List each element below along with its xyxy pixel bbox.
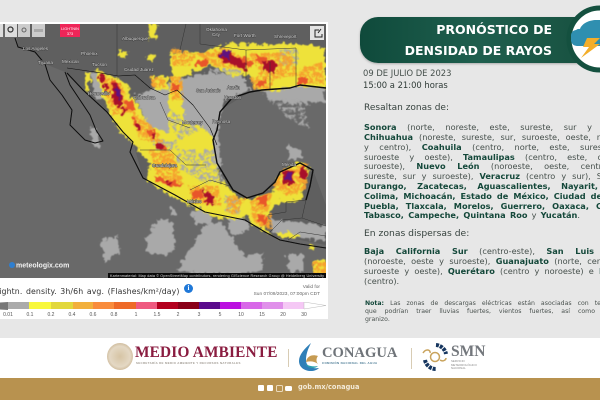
- header banner: [360, 17, 600, 63]
- text block: main lightning zones: suroeste), Nuevo León (noroeste, oeste, centr: [364, 161, 600, 171]
- city labels: Reynosa: [212, 119, 231, 124]
- city labels: Houston: [224, 95, 242, 100]
- text block: main lightning zones: sureste, sur y suroeste), Veracruz (centro y sur), S: [364, 171, 600, 181]
- city labels: Oklahoma: [206, 27, 227, 32]
- legend tick labels: 15: [259, 312, 265, 318]
- legend tick labels: 30: [301, 312, 307, 318]
- intro: En zonas dispersas de: En zonas dispersas de:: [364, 228, 469, 239]
- legend color scale: [0, 302, 326, 310]
- text block: main lightning zones: suroeste y oeste), Tamaulipas (centro, este, c: [364, 152, 600, 162]
- text block: main lightning zones: Colima, Michoacán, Estado de México, Ciudad de: [364, 191, 600, 201]
- city labels: Austin: [227, 85, 240, 90]
- text block: main lightning zones: Chihuahua (noreste, sureste, sur, suroeste, oeste, n: [364, 132, 600, 142]
- city labels: Monterrey: [182, 120, 203, 125]
- tagline: SERVICIO: [451, 359, 465, 363]
- map: [0, 24, 326, 278]
- valid time: Sun 07/09/2023, 07:00pm CDT: [254, 292, 320, 296]
- city labels: [23, 27, 297, 204]
- title: [405, 22, 552, 58]
- wordmark: MEDIO AMBIENTE: [135, 344, 278, 361]
- red lightning counter badge: LIGHTNIN: [61, 27, 79, 31]
- icon: storm cloud badge: [571, 6, 600, 72]
- legend tick labels: [3, 312, 307, 318]
- panel: lightning density map card: [0, 22, 328, 319]
- legend tick labels: 3: [198, 312, 200, 318]
- city labels: Phoenix: [81, 51, 98, 56]
- red lightning counter badge: 373: [67, 32, 73, 36]
- intro: Resaltan zonas de: Resaltan zonas de:: [364, 103, 449, 113]
- valid time: Valid for: [303, 285, 320, 290]
- city labels: Ciudad Juárez: [124, 67, 154, 72]
- legend tick labels: 0.8: [111, 312, 117, 318]
- icon: water wave: [299, 343, 319, 371]
- icon: info: [184, 284, 193, 293]
- title: PRONÓSTICO DE: [436, 22, 552, 36]
- text block: scattered zones: (noroeste, oeste y suroeste), Guanajuato (norte, cen: [364, 256, 600, 266]
- city labels: Hermosillo: [88, 91, 110, 96]
- logo: SMN: [422, 343, 486, 371]
- legend tick labels: 0.6: [90, 312, 96, 318]
- city labels: Albuquerque: [122, 36, 148, 41]
- legend tick labels: 0.1: [27, 312, 33, 318]
- social icons: [258, 385, 292, 392]
- icon: national seal: [107, 343, 133, 370]
- text block: main lightning zones: Sonora (norte, noreste, este, sureste, sur y: [364, 122, 592, 132]
- note: granizo.: [365, 316, 390, 323]
- text block: main lightning zones: Durango, Zacatecas, Aguascalientes, Nayarit,: [364, 181, 598, 191]
- logo: Conagua: [299, 343, 398, 371]
- text block: scattered zones: [364, 246, 600, 286]
- legend tick labels: 0.4: [69, 312, 75, 318]
- city labels: Chihuahua: [133, 95, 156, 100]
- wordmark: CONAGUA: [322, 345, 397, 361]
- text block: scattered zones: suroeste y oeste), Querétaro (centro y noroeste) e I: [364, 266, 600, 276]
- legend tick labels: 0.01: [3, 312, 13, 318]
- city labels: San Antonio: [196, 88, 221, 93]
- city labels: Los Angeles: [23, 46, 49, 51]
- tagline: COMISIÓN NACIONAL DEL AGUA: [322, 361, 377, 365]
- text block: main lightning zones: y centro), Coahuila (centro, norte, este, sures: [364, 142, 600, 152]
- tagline: NACIONAL: [451, 366, 466, 370]
- city labels: Tijuana: [38, 60, 53, 65]
- legend title: lightn. density. 3h/6h avg. (Flashes/km²/day): [0, 287, 180, 296]
- map toolbar icons: [0, 24, 45, 37]
- logo: Medio Ambiente: [107, 343, 278, 370]
- city labels: Guadalajara: [152, 163, 177, 168]
- tagline: [451, 359, 477, 370]
- title: DENSIDAD DE RAYOS: [405, 42, 552, 58]
- note: Nota: Las zonas de descargas eléctricas están asociadas con te: [365, 300, 600, 307]
- legend tick labels: 1: [135, 312, 137, 318]
- text block: scattered zones: Baja California Sur (centro-este), San Luis: [364, 246, 594, 256]
- legend tick labels: 0.2: [48, 312, 54, 318]
- legend tick labels: 10: [238, 312, 244, 318]
- city labels: Mérida: [282, 162, 296, 167]
- city labels: Fort Worth: [234, 33, 256, 38]
- icon: info: i: [188, 284, 189, 292]
- date and time: 09 DE JULIO DE 2023: [363, 68, 451, 78]
- city labels: Mexicali: [62, 59, 79, 64]
- legend tick labels: 2: [177, 312, 179, 318]
- city labels: Tucson: [92, 62, 107, 67]
- text block: main lightning zones: Tabasco, Campeche, Quintana Roo y Yucatán.: [364, 210, 580, 220]
- city labels: México: [187, 199, 202, 204]
- note: que podrían traer lluvias fuertes, vientos fuertes, así como: [365, 308, 595, 315]
- website: gob.mx/conagua: [298, 383, 359, 391]
- legend tick labels: 1.5: [154, 312, 160, 318]
- footer logos band: [0, 338, 600, 378]
- text block: main lightning zones: Puebla, Tlaxcala, Morelos, Guerrero, Oaxaca, C: [364, 201, 600, 211]
- map attribution: Kartenmaterial: Map data © OpenStreetMap contributors, rendering GIScience Research Group @ Heidelberg University: [110, 274, 324, 278]
- red lightning counter badge: [60, 24, 80, 37]
- meteologix logo: meteologix.com: [16, 262, 69, 270]
- tagline: SECRETARÍA DE MEDIO AMBIENTE Y RECURSOS NATURALES: [136, 361, 241, 365]
- text block: main lightning zones: [364, 122, 600, 220]
- date and time: [363, 68, 451, 90]
- legend tick labels: 20: [280, 312, 286, 318]
- city labels: City: [212, 32, 221, 37]
- date and time: 15:00 a 21:00 horas: [363, 80, 448, 90]
- legend tick labels: 5: [219, 312, 221, 318]
- valid time: [254, 284, 320, 296]
- city labels: Shreveport: [274, 34, 297, 39]
- text block: scattered zones: (centro).: [364, 276, 399, 286]
- footer social bar: [0, 378, 600, 400]
- tagline: METEOROLÓGICO: [451, 363, 477, 367]
- icon: gear and spiral: [422, 343, 448, 371]
- wordmark: SMN: [451, 343, 485, 360]
- share button: [310, 26, 324, 40]
